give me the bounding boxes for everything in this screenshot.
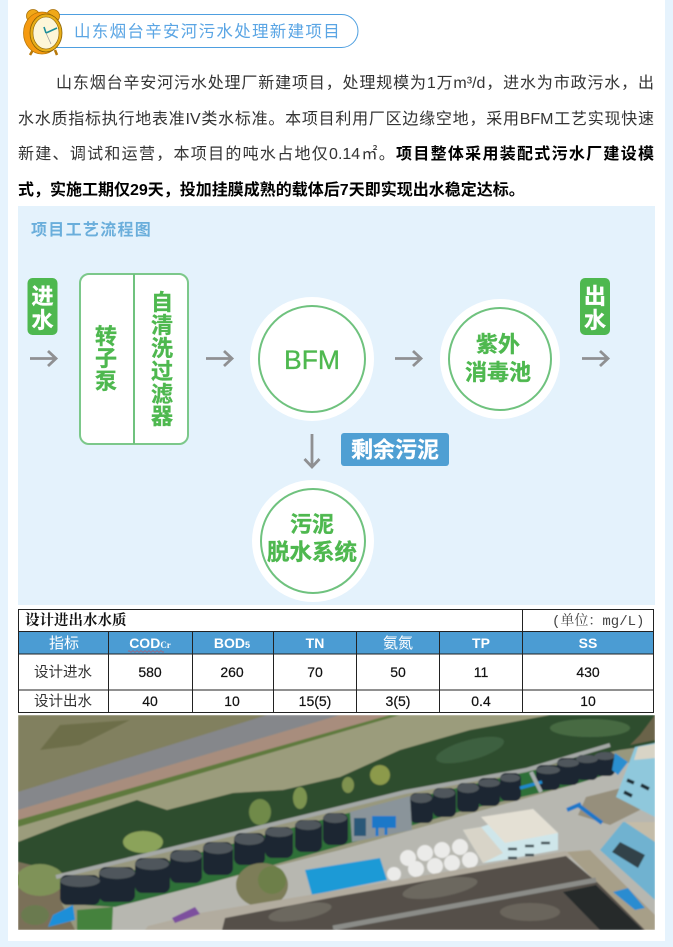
outlet label: 出 [584, 284, 606, 309]
panel: process flow diagram [18, 206, 655, 605]
table row: design effluent: 0.4 [471, 693, 491, 709]
table header row [49, 635, 597, 652]
right concrete strip [566, 850, 655, 930]
pump and self-cleaning filter box: 滤 [151, 382, 173, 407]
table row: design influent: 11 [474, 664, 488, 680]
green grass strip [86, 764, 602, 908]
table unit: (单位：mg/L) [552, 613, 644, 630]
tree in yard [236, 863, 288, 907]
pipe gantry [56, 745, 610, 877]
table: design influent and effluent quality [18, 610, 654, 712]
table row: design influent [34, 664, 600, 681]
UV disinfection circle [440, 299, 560, 419]
arrow: inlet [30, 351, 56, 366]
pump and self-cleaning filter box: 过 [151, 359, 173, 384]
table row: design influent: 设计进水 [34, 664, 92, 681]
excess sludge label: 剩余污泥 [351, 438, 439, 462]
pump and self-cleaning filter box: 器 [151, 404, 173, 429]
table row: design influent: 580 [138, 664, 162, 680]
black tanks [60, 752, 615, 905]
outlet label [580, 278, 610, 335]
excess sludge label [341, 433, 449, 466]
inlet label: 进 [31, 284, 54, 309]
table title: 设计进出水水质 [25, 611, 127, 629]
icon: alarm clock [24, 10, 62, 55]
small blue roof and purple pipe [48, 905, 75, 927]
table header row: 氨氮 [383, 635, 413, 652]
pump and self-cleaning filter box: 自 [151, 290, 173, 315]
pump and self-cleaning filter box: 子 [95, 346, 117, 371]
inlet label [28, 278, 58, 335]
sludge dewatering circle: 污泥 [290, 512, 334, 537]
title pill [40, 14, 358, 48]
table header row: SS [579, 635, 597, 651]
sludge dewatering circle [252, 480, 374, 602]
arrow: outlet [582, 351, 608, 366]
table row: design effluent: 设计出水 [34, 693, 92, 710]
photo: aerial view of the plant [16, 715, 655, 930]
blue roof shed [305, 858, 387, 895]
table header row: 指标 [49, 635, 79, 652]
table row: design effluent: 3(5) [386, 693, 410, 709]
table row: design effluent: 15(5) [299, 693, 331, 709]
table header row: BOD5 [214, 635, 250, 651]
body paragraph [18, 74, 654, 199]
arrow: down to sludge dewatering [304, 434, 320, 467]
arrow: to BFM [206, 351, 232, 366]
table row: design effluent: 40 [142, 693, 158, 709]
pump and self-cleaning filter box: 清 [151, 313, 173, 338]
white building [481, 824, 559, 864]
body paragraph: 水水质指标执行地表准IV类水标准。本项目利用厂区边缘空地，采用BFM工艺实现快速 [18, 111, 654, 128]
white chemical tanks [387, 839, 478, 881]
pump and self-cleaning filter box: 洗 [151, 336, 173, 361]
table row: design effluent [34, 693, 596, 710]
body paragraph: 新建、调试和运营，本项目的吨水占地仅0.14㎡。项目整体采用装配式污水厂建设模 [18, 146, 654, 163]
table row: design effluent: 10 [580, 693, 596, 709]
far-right yard and equipment [578, 785, 640, 825]
body paragraph: 式，实施工期仅29天，投加挂膜成熟的载体后7天即实现出水稳定达标。 [18, 182, 525, 199]
body paragraph: 山东烟台辛安河污水处理厂新建项目，处理规模为1万m³/d，进水为市政污水，出 [56, 75, 654, 92]
sludge dewatering circle: 脱水系统 [267, 540, 357, 565]
table header row: TN [306, 635, 324, 651]
UV disinfection circle: 消毒池 [465, 360, 531, 385]
table header row: CODCr [129, 635, 171, 651]
title pill: 山东烟台辛安河污水处理新建项目 [74, 22, 341, 41]
BFM circle: BFM [284, 345, 340, 375]
table row: design effluent: 10 [224, 693, 240, 709]
arrow: to UV [395, 351, 421, 366]
UV disinfection circle: 紫外 [476, 332, 520, 357]
tank tops [60, 752, 615, 887]
BFM circle [250, 297, 374, 421]
blue pipe and stair [520, 782, 542, 788]
concrete yard [77, 762, 655, 930]
flow title: 项目工艺流程图 [31, 220, 152, 239]
table row: design influent: 430 [576, 664, 600, 680]
table row: design influent: 70 [307, 664, 323, 680]
outlet label: 水 [584, 308, 606, 333]
blue process equipment [350, 796, 412, 842]
inlet label: 水 [31, 308, 54, 333]
pump and self-cleaning filter box [80, 274, 188, 444]
right-side buildings [616, 743, 655, 817]
table row: design influent: 50 [390, 664, 406, 680]
aeration pool [145, 851, 572, 930]
table row: design influent: 260 [220, 664, 244, 680]
pump and self-cleaning filter box: 转 [95, 324, 117, 349]
table header row: TP [472, 635, 490, 651]
pump and self-cleaning filter box: 泵 [95, 369, 117, 394]
